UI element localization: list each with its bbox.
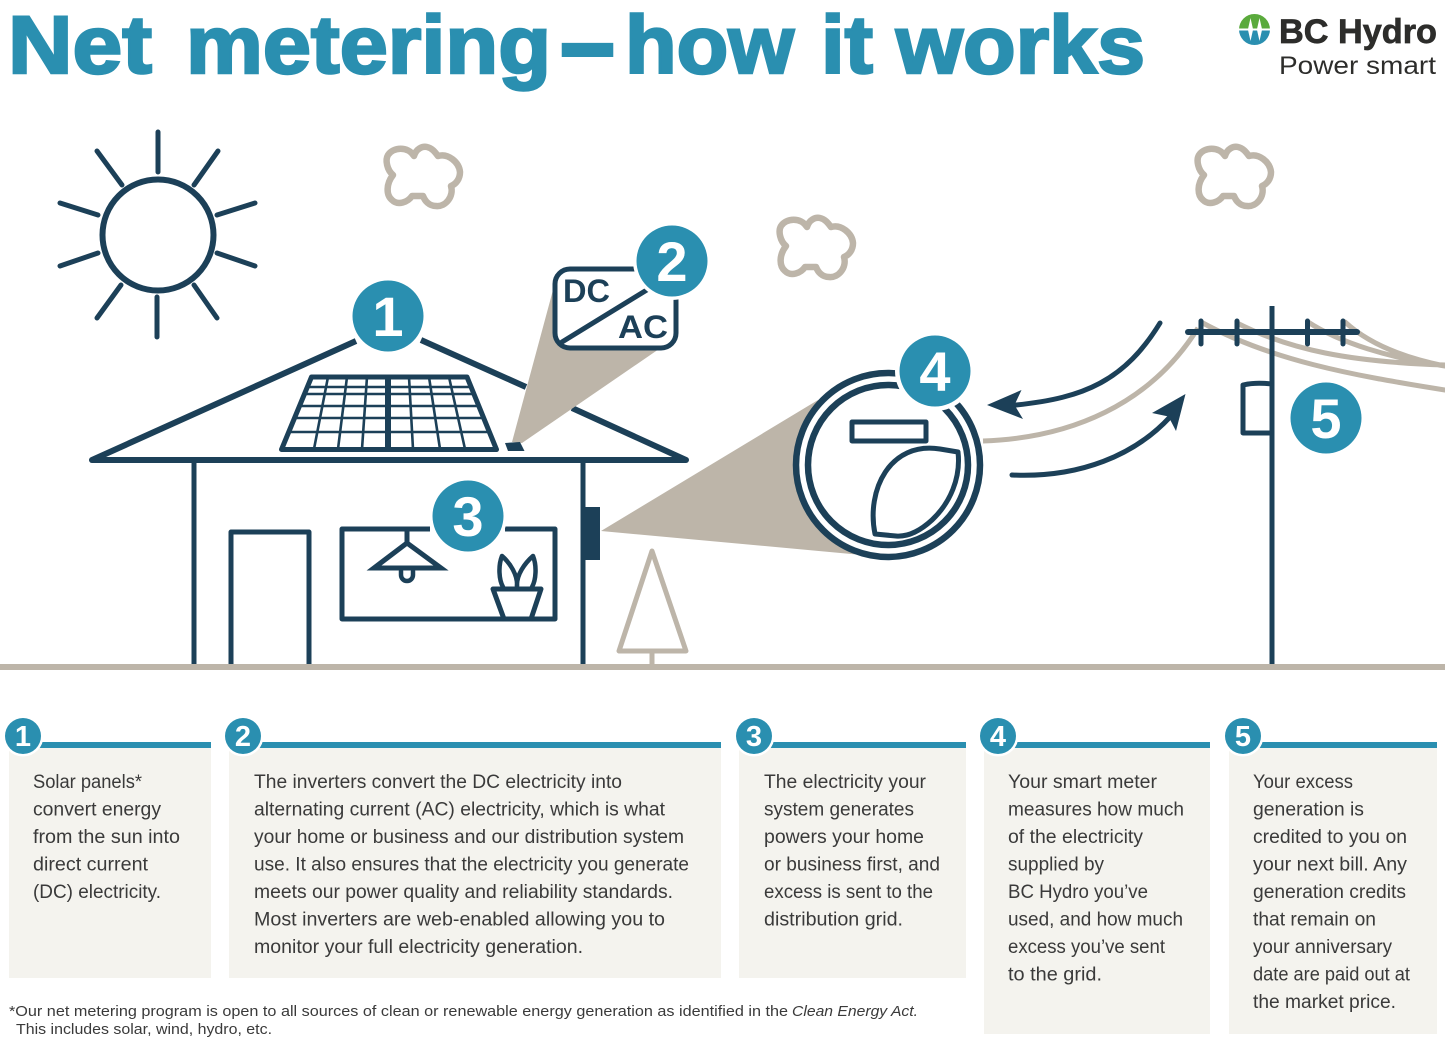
step 2 text: meets our power quality and reliability standards. [254, 882, 673, 903]
panel: step 4 [978, 716, 1210, 1034]
icon: lamp [374, 529, 441, 581]
panel background [1229, 745, 1437, 1034]
panel: step 1 [2, 716, 211, 978]
callout cone [601, 400, 862, 555]
house door [231, 532, 309, 665]
meter on wall [585, 507, 600, 560]
step 5 text: your next bill. Any [1253, 854, 1408, 876]
marker 3 [429, 477, 507, 555]
house roof [92, 340, 686, 460]
step 2 text: alternating current (AC) electricity, which is what [254, 800, 666, 820]
icon: cloud left [387, 147, 460, 206]
logo: BC Hydro Power smart [1239, 13, 1437, 80]
marker 1: 1 [372, 285, 404, 348]
step 2 text: Most inverters are web-enabled allowing you to [254, 910, 665, 930]
footnote: Clean Energy Act. [792, 1003, 918, 1020]
step 5 text: generation credits [1253, 882, 1406, 903]
icon: cloud right [1198, 147, 1271, 206]
title: it [821, 0, 873, 91]
step 2 text: use. It also ensures that the electricity you generate [254, 854, 689, 876]
step 2 text: your home or business and our distribution system [254, 827, 684, 848]
step 4 text: supplied by [1008, 854, 1104, 876]
marker 4: 4 [919, 340, 951, 403]
step number 1 [2, 716, 44, 756]
panel: step 5 [1222, 716, 1437, 1034]
step number 2: 2 [235, 721, 251, 753]
house [92, 340, 686, 665]
callout cone [512, 290, 659, 443]
step 5 text: date are paid out at [1253, 964, 1411, 986]
step 4 text: Your smart meter [1008, 772, 1158, 793]
inverter diagonal [562, 288, 650, 342]
title: metering [186, 0, 551, 91]
marker 3: 3 [452, 485, 484, 548]
DC label: DC [563, 273, 610, 309]
step 5 text: generation is [1253, 800, 1364, 820]
step 3 text: powers your home [764, 827, 924, 848]
icon: solar panel [282, 377, 496, 450]
step 1 text [33, 772, 180, 903]
panel background [9, 745, 211, 978]
step 1 text: direct current [33, 854, 149, 876]
step 4 text: used, and how much [1008, 910, 1183, 930]
arrow: meter to grid [1012, 394, 1186, 475]
icon: cloud middle [780, 218, 853, 277]
marker 1 [352, 280, 424, 352]
step 5 text: credited to you on [1253, 827, 1407, 848]
marker 2 [633, 222, 711, 300]
step 4 text: to the grid. [1008, 964, 1102, 986]
step number 1: 1 [15, 721, 31, 753]
step 3 text [764, 772, 940, 930]
step 4 text: of the electricity [1008, 827, 1144, 848]
icon: potted plant [493, 556, 541, 619]
step number 5 [1222, 716, 1264, 756]
step number 4: 4 [990, 721, 1006, 753]
step 5 text [1253, 772, 1411, 1013]
step 3 text: or business first, and [764, 854, 940, 876]
step 1 text: from the sun into [33, 827, 180, 848]
icon: tree [619, 551, 686, 665]
marker 5 [1290, 382, 1362, 454]
panel: step 2 [222, 716, 721, 978]
meter display [852, 422, 926, 441]
footnote: *Our net metering program is open to all sources of clean or renewable energy generation as identified in the [9, 1003, 788, 1020]
panel rule [739, 742, 966, 748]
step 5 text: Your excess [1253, 772, 1353, 793]
marker 5: 5 [1310, 387, 1342, 450]
pole transformer [1243, 383, 1272, 433]
step 1 text: convert energy [33, 800, 162, 820]
inverter box [555, 269, 676, 348]
panel background [739, 745, 966, 978]
panel rule [1229, 742, 1437, 748]
step 5 text: the market price. [1253, 992, 1396, 1013]
step 4 text: BC Hydro you’ve [1008, 882, 1148, 903]
step number 2 [222, 716, 264, 756]
step 4 text [1008, 772, 1184, 986]
ground line [0, 664, 1445, 670]
icon: BC Hydro globe [1239, 14, 1270, 45]
meter dial [873, 448, 958, 536]
step 5 text: your anniversary [1253, 937, 1392, 958]
title [8, 0, 1145, 91]
step number 3: 3 [746, 721, 762, 753]
step 1 text: Solar panels* [33, 772, 143, 793]
footnote: This includes solar, wind, hydro, etc. [16, 1021, 272, 1038]
inverter unit [505, 442, 524, 451]
step 4 text: measures how much [1008, 800, 1184, 820]
step number 4 [978, 716, 1018, 756]
step number 5: 5 [1235, 721, 1251, 753]
icon: smart meter callout [585, 373, 980, 560]
title: works [895, 0, 1145, 91]
panel rule [9, 742, 211, 748]
step 3 text: distribution grid. [764, 910, 903, 930]
AC label: AC [618, 309, 668, 345]
arrow: grid to meter [987, 323, 1160, 419]
logo wordmark: BC Hydro [1279, 13, 1437, 51]
panel rule [984, 742, 1210, 748]
house walls [194, 460, 583, 665]
step 3 text: system generates [764, 800, 914, 820]
footnote [9, 1003, 918, 1038]
step 3 text: excess is sent to the [764, 882, 933, 903]
title: — [564, 0, 612, 90]
title: how [625, 0, 794, 91]
panel background [984, 745, 1210, 1034]
marker 4 [895, 331, 975, 411]
icon: sun [60, 132, 255, 337]
step 2 text [254, 772, 689, 958]
step 5 text: that remain on [1253, 910, 1376, 930]
power pole [1188, 306, 1357, 665]
step 2 text: monitor your full electricity generation. [254, 937, 583, 958]
step 4 text: excess you’ve sent [1008, 937, 1166, 958]
step 2 text: The inverters convert the DC electricity into [254, 772, 622, 793]
house window [342, 529, 555, 619]
wire to meter [983, 328, 1198, 441]
meter outer ring [796, 373, 980, 557]
panel rule [229, 742, 721, 748]
panel background [229, 745, 721, 978]
title: Net [8, 0, 152, 91]
step 1 text: (DC) electricity. [33, 882, 161, 903]
step number 3 [734, 716, 774, 756]
panel: step 3 [734, 716, 966, 978]
meter inner ring [808, 385, 968, 545]
overhead wires [1201, 322, 1445, 390]
logo tagline: Power smart [1279, 52, 1436, 80]
marker 2: 2 [656, 230, 688, 293]
step 3 text: The electricity your [764, 772, 927, 793]
inverter callout [505, 269, 676, 451]
